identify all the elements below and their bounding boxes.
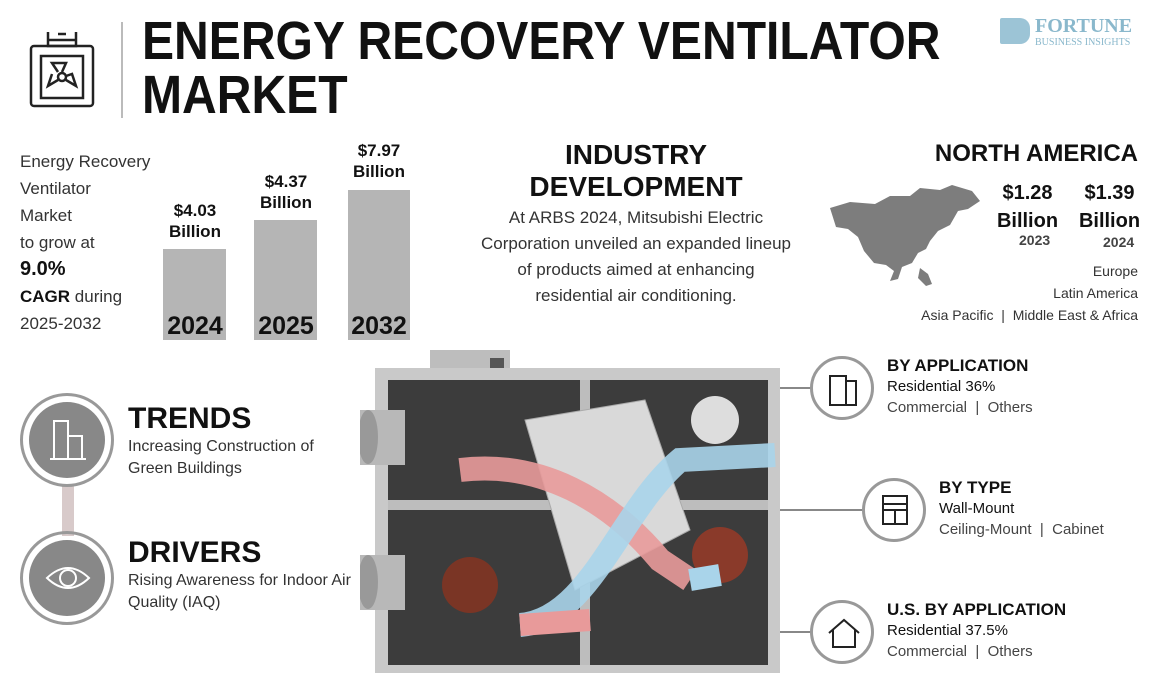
NA values: Billion — [997, 210, 1058, 232]
trends text: TRENDS — [128, 402, 251, 435]
industry development: residential air conditioning. — [535, 286, 737, 305]
bar chart: Billion — [353, 162, 405, 181]
US by application text: Residential 37.5% — [887, 622, 1008, 639]
connector lines — [780, 387, 812, 389]
US by application text — [887, 600, 1066, 660]
NA values — [997, 182, 1058, 232]
US by application text: Commercial | Others — [887, 643, 1033, 660]
by application text: BY APPLICATION — [887, 356, 1028, 375]
logo: BUSINESS INSIGHTS — [1035, 37, 1130, 48]
text: growth summary — [20, 152, 150, 333]
by application text: Commercial | Others — [887, 399, 1033, 416]
text: Billion — [1079, 210, 1140, 232]
bar chart: 2025 — [258, 312, 314, 340]
map — [830, 185, 980, 286]
divider — [121, 22, 123, 118]
icon: US by application — [810, 600, 874, 664]
industry development: DEVELOPMENT — [529, 171, 743, 202]
logo — [1000, 15, 1132, 48]
title — [142, 11, 940, 125]
bar chart: $4.37 — [265, 172, 307, 191]
text: growth summary: 2025-2032 — [20, 314, 101, 333]
NA values: $1.28 — [1002, 182, 1053, 204]
bar chart: 2032 — [351, 312, 407, 340]
by application text: Residential 36% — [887, 378, 995, 395]
drivers text — [128, 536, 351, 611]
text: 2023 — [1019, 232, 1050, 248]
industry development — [481, 139, 791, 305]
regions — [921, 263, 1138, 323]
icon: trends — [20, 393, 114, 487]
text: growth summary: Market — [20, 206, 72, 225]
logo: FORTUNE — [1035, 15, 1132, 37]
by application text — [887, 356, 1033, 416]
icon: by application — [810, 356, 874, 420]
north america title: NORTH AMERICA — [935, 140, 1138, 167]
industry development: Corporation unveiled an expanded lineup — [481, 234, 791, 253]
title: MARKET — [142, 65, 348, 125]
regions: Latin America — [1053, 285, 1138, 301]
trends text: Increasing Construction of — [128, 438, 314, 455]
bar chart: $4.03 — [174, 201, 216, 220]
text: growth summary: CAGR during — [20, 287, 122, 306]
US by application text: U.S. BY APPLICATION — [887, 600, 1066, 619]
by type text: BY TYPE — [939, 478, 1011, 497]
industry development: At ARBS 2024, Mitsubishi Electric — [509, 208, 763, 227]
regions: Europe — [1093, 263, 1138, 279]
text: $1.39 — [1084, 182, 1135, 204]
trends/drivers connector — [62, 484, 74, 536]
industry development: of products aimed at enhancing — [517, 260, 755, 279]
regions: Asia Pacific | Middle East & Africa — [921, 307, 1138, 323]
trends text — [128, 402, 314, 477]
trends text: Green Buildings — [128, 460, 242, 477]
bar chart: 2024 — [167, 312, 223, 340]
text: growth summary: Ventilator — [20, 179, 91, 198]
drivers text: Rising Awareness for Indoor Air — [128, 572, 351, 589]
icon: drivers — [20, 531, 114, 625]
by type text — [939, 478, 1104, 538]
icon: ventilator header icon — [30, 32, 94, 108]
ventilator illustration — [360, 350, 780, 673]
by type text: Ceiling-Mount | Cabinet — [939, 521, 1104, 538]
bar chart: $7.97 — [358, 141, 400, 160]
drivers text: Quality (IAQ) — [128, 594, 220, 611]
bar chart — [163, 141, 410, 340]
text: growth summary: Energy Recovery — [20, 152, 150, 171]
drivers text: DRIVERS — [128, 536, 261, 569]
icon: by type — [862, 478, 926, 542]
text: growth summary: 9.0% — [20, 258, 66, 280]
bar chart: Billion — [169, 222, 221, 241]
text: growth summary: to grow at — [20, 233, 95, 252]
industry development: INDUSTRY — [565, 139, 707, 170]
bar chart: Billion — [260, 193, 312, 212]
title: ENERGY RECOVERY VENTILATOR — [142, 11, 940, 71]
text: 2024 — [1103, 234, 1134, 250]
by type text: Wall-Mount — [939, 500, 1014, 517]
